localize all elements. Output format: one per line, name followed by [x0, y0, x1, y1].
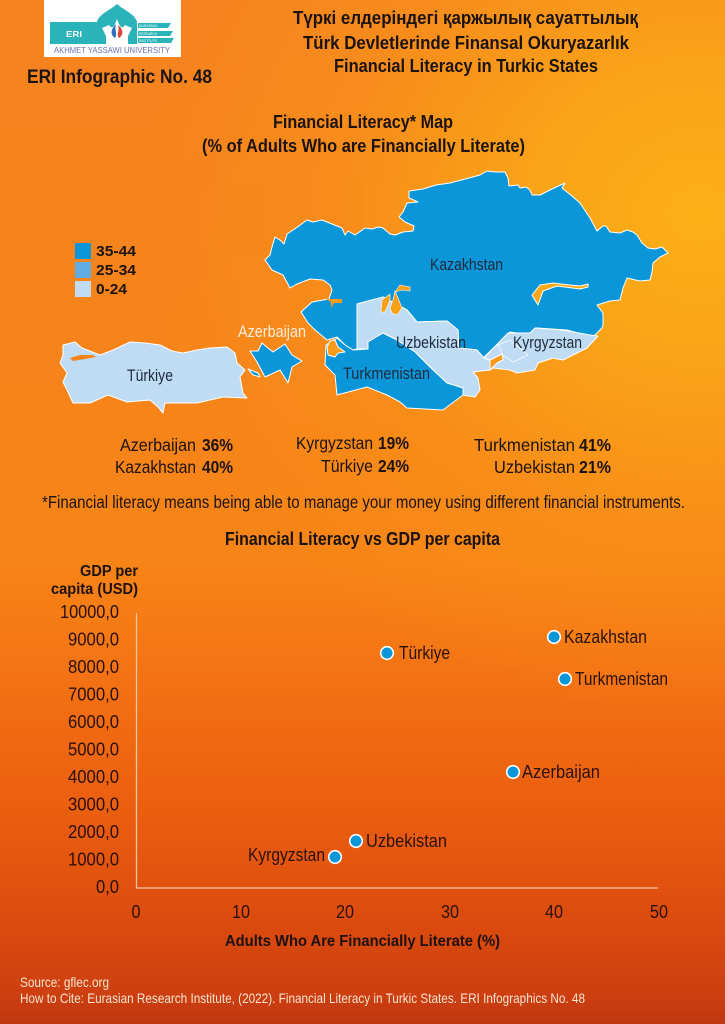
title: Түркі елдеріндегі қаржылық сауаттылық — [293, 8, 639, 28]
map labels — [127, 256, 582, 385]
chart heading: Financial Literacy vs GDP per capita — [225, 529, 501, 549]
map: Kazakhstan — [265, 171, 668, 358]
legend: 35-44 — [96, 244, 136, 260]
y axis labels: 10000,0 — [60, 601, 119, 622]
country percentages: 21% — [579, 457, 611, 477]
map: Sea of Marmara — [70, 355, 96, 361]
logo: ERI Akhmet Yassawi University: EURASIAN — [139, 24, 157, 28]
logo: ERI Akhmet Yassawi University: ERI — [66, 29, 82, 39]
y axis labels: 4000,0 — [68, 766, 119, 787]
y axis labels: 2000,0 — [68, 821, 119, 842]
country percentages: 24% — [378, 456, 409, 476]
data labels: Kazakhstan — [564, 627, 647, 647]
y axis labels: 7000,0 — [68, 684, 119, 704]
scatter chart — [51, 563, 668, 950]
infographic number: ERI Infographic No. 48 — [27, 66, 212, 88]
map heading: (% of Adults Who are Financially Literate) — [202, 136, 525, 156]
map labels: Kazakhstan — [430, 256, 503, 274]
country percentages: 41% — [579, 435, 611, 455]
y axis labels: 5000,0 — [68, 738, 119, 760]
data labels: Azerbaijan — [522, 762, 600, 782]
map labels: Turkmenistan — [343, 365, 430, 383]
y axis labels: 0,0 — [96, 876, 119, 897]
map: Aral Sea — [381, 285, 410, 315]
data labels: Uzbekistan — [366, 831, 447, 851]
map heading — [202, 112, 525, 156]
x axis labels: 40 — [545, 901, 563, 922]
logo: ERI Akhmet Yassawi University: INSTITUTE — [139, 39, 158, 43]
country percentages: Turkmenistan — [474, 435, 575, 455]
country percentages: 40% — [202, 457, 233, 477]
map: Nakhchivan — [248, 369, 260, 377]
y axis title: GDP per — [80, 563, 138, 580]
x axis labels: 50 — [650, 901, 668, 922]
x axis labels — [132, 901, 668, 922]
y axis labels — [60, 601, 119, 897]
map labels: Azerbaijan — [238, 323, 306, 341]
map: Turkmenistan — [325, 333, 463, 410]
logo: ERI Akhmet Yassawi University: AKHMET YASSAWI UNIVERSITY — [54, 46, 171, 55]
map: Azerbaijan — [250, 343, 302, 383]
x axis labels: 0 — [132, 901, 140, 922]
country percentages: Kyrgyzstan — [296, 433, 373, 453]
map: bay inlet — [326, 299, 342, 308]
x axis title: Adults Who Are Financially Literate (%) — [225, 933, 500, 950]
title — [293, 8, 639, 76]
x axis labels: 10 — [232, 901, 250, 922]
legend: 25-34 — [96, 263, 136, 279]
country percentages: 36% — [202, 435, 233, 455]
axes — [136, 613, 658, 888]
map: Kara-Bogaz — [327, 340, 345, 357]
legend — [75, 243, 136, 298]
x axis labels: 30 — [441, 901, 459, 922]
data labels — [248, 627, 668, 865]
data labels: Kyrgyzstan — [248, 845, 325, 865]
map: Uzbekistan — [357, 297, 490, 397]
map labels: Türkiye — [127, 367, 173, 385]
source and citation: Source: gflec.org — [20, 974, 109, 990]
logo: ERI Akhmet Yassawi University — [44, 0, 181, 57]
data points — [329, 631, 571, 863]
country percentages: Azerbaijan — [120, 435, 196, 455]
map: Türkiye — [60, 342, 247, 413]
country percentages: Kazakhstan — [115, 457, 196, 477]
map heading: Financial Literacy* Map — [273, 112, 453, 132]
legend: 0-24 — [96, 282, 127, 298]
source and citation: How to Cite: Eurasian Research Institute, (2022). Financial Literacy in Turkic States. ERI Infographics No. 48 — [20, 990, 585, 1006]
country percentages — [115, 433, 611, 477]
country percentages: Uzbekistan — [494, 457, 575, 477]
title: Türk Devletlerinde Finansal Okuryazarlık — [303, 33, 630, 53]
title: Financial Literacy in Turkic States — [334, 56, 598, 76]
map labels: Uzbekistan — [396, 334, 466, 352]
source and citation — [20, 974, 585, 1006]
y axis labels: 8000,0 — [68, 656, 119, 677]
y axis title: capita (USD) — [51, 581, 138, 598]
map — [60, 171, 668, 413]
country percentages: 19% — [378, 433, 409, 453]
x axis labels: 20 — [336, 901, 354, 922]
country percentages: Türkiye — [321, 456, 373, 476]
data labels: Turkmenistan — [575, 669, 668, 689]
map: Kyrgyzstan — [484, 328, 598, 373]
data labels: Türkiye — [399, 643, 450, 663]
map labels: Kyrgyzstan — [513, 334, 582, 352]
y axis labels: 9000,0 — [68, 628, 119, 650]
map: Kyrgyz inner border — [498, 340, 528, 362]
logo: ERI Akhmet Yassawi University: RESEARCH — [139, 32, 157, 36]
y axis labels: 1000,0 — [68, 848, 119, 870]
y axis labels: 6000,0 — [68, 711, 119, 732]
map: Lake Balkhash — [532, 283, 588, 305]
y axis title — [51, 563, 138, 598]
y axis labels: 3000,0 — [68, 794, 119, 814]
